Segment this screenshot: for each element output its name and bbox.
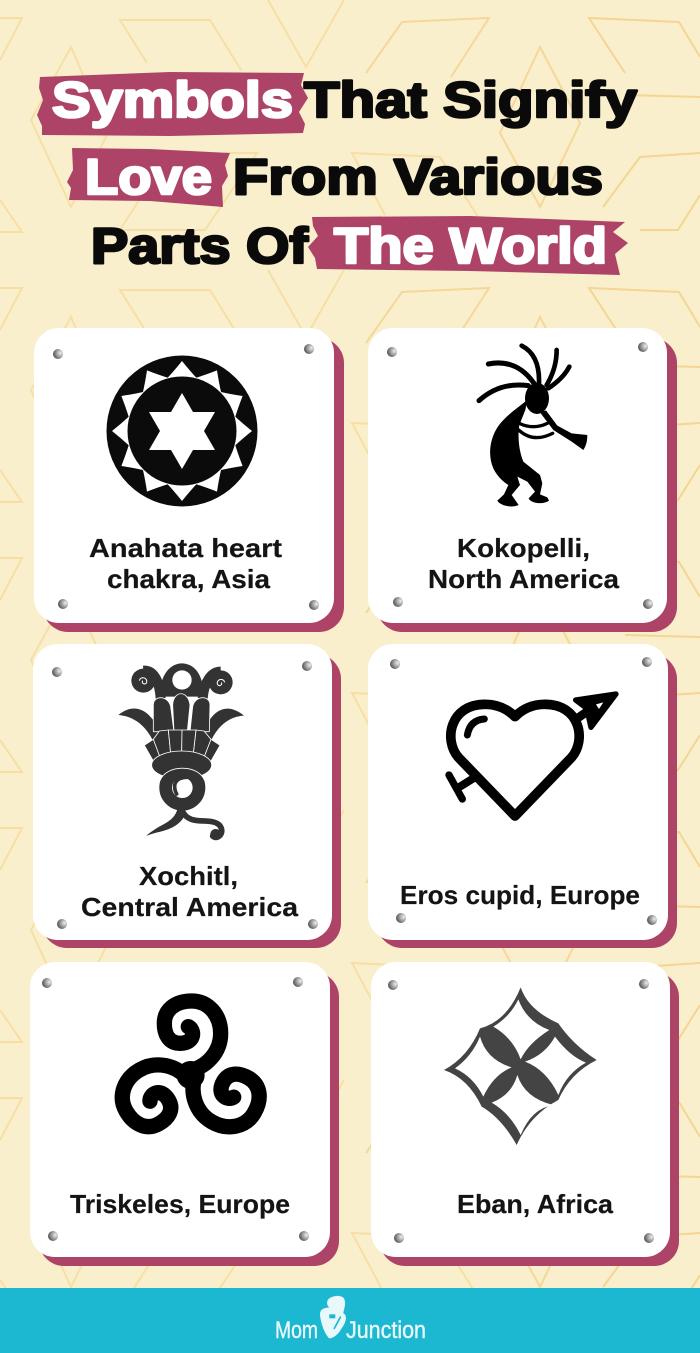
title ribbon: The World — [308, 216, 628, 275]
title text: line 1: That Signify — [304, 72, 637, 128]
title text: line 2 — [85, 149, 603, 205]
label: Anahata heart chakra, Asia: chakra, Asia — [107, 564, 271, 594]
icon: eban — [444, 987, 597, 1145]
icon: xochitl flower — [118, 663, 244, 840]
title ribbon: Symbols — [37, 72, 308, 136]
label: Triskeles, Europe: Triskeles, Europe — [70, 1189, 290, 1219]
footer band — [0, 1288, 700, 1353]
panel: Triskeles — [30, 962, 339, 1266]
panel: Eros cupid — [368, 644, 677, 948]
label: Xochitl, Central America: Xochitl, — [139, 861, 238, 891]
title — [37, 72, 637, 275]
label: Eban, Africa: Eban, Africa — [457, 1189, 614, 1219]
icon: kokopelli — [479, 346, 587, 506]
label: Anahata heart chakra, Asia — [89, 533, 282, 594]
panel: Xochitl — [33, 644, 341, 948]
title text: line 2: Love — [85, 149, 212, 205]
label: Kokopelli, North America — [428, 533, 620, 594]
logo: MomJunction — [275, 1296, 426, 1344]
label: Kokopelli, North America: North America — [428, 564, 620, 594]
logo: MomJunction: Mom — [275, 1317, 318, 1344]
icon: triskeles spiral — [112, 1001, 268, 1138]
title text: line 1 — [52, 72, 637, 128]
label: Xochitl, Central America — [81, 861, 299, 922]
label: Xochitl, Central America: Central America — [81, 892, 299, 922]
panel: Kokopelli — [368, 328, 677, 632]
title text: line 1: Symbols — [52, 72, 293, 128]
title text: line 3: The World — [334, 218, 607, 274]
icon: anahata chakra — [106, 356, 258, 506]
title text: line 3 — [91, 218, 607, 274]
label: Kokopelli, North America: Kokopelli, — [457, 533, 590, 563]
panel: Anahata heart chakra — [34, 328, 344, 632]
title ribbon: Love — [67, 148, 230, 207]
panel: Eban — [371, 962, 679, 1266]
title text: line 2: From Various — [233, 149, 603, 205]
logo: MomJunction: Junction — [346, 1317, 426, 1344]
logo icon: mother and child — [320, 1296, 346, 1338]
label: Anahata heart chakra, Asia: Anahata heart — [89, 533, 282, 563]
title text: line 3: Parts Of — [91, 218, 308, 274]
label: Eros cupid, Europe: Eros cupid, Europe — [400, 880, 640, 910]
icon: heart with arrow — [449, 694, 616, 816]
